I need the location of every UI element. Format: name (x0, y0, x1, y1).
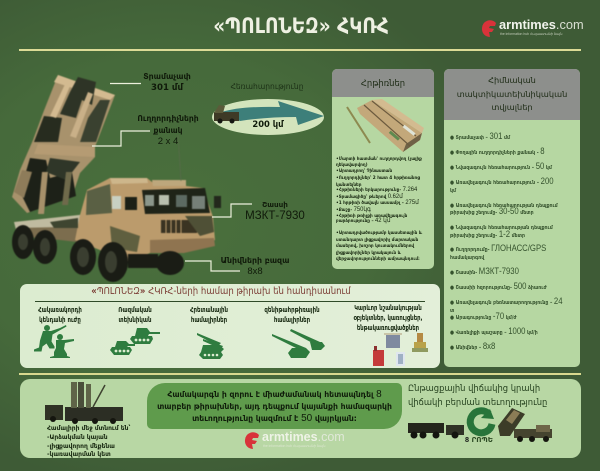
rocket specs: •Մարտի հատման՝ ուղղորդվող (չալիք (336, 157, 422, 162)
callout: simultaneous targets: տարբեր թիրախներ, այդ դեպքում կայանքի համազարկի (157, 402, 392, 411)
panel: rockets: •Քաշը- 750կգ (336, 206, 371, 213)
panel: rockets: •Տրամագիծը՝ թևերով 0.62մ (336, 193, 403, 200)
specifications list (450, 131, 563, 351)
composition text: -կառավարման կետ (47, 451, 111, 458)
composition text: -լիցքավորող մեքենա (47, 443, 115, 450)
label: launch tubes (137, 114, 199, 147)
specifications list: ● Շասսիի հզորությունը- 500 ձիաուժ (450, 281, 547, 291)
specifications list: ● Անիվներ – 8x8 (450, 341, 495, 351)
target: artillery: համալիրներ (191, 316, 227, 324)
specs heading: Հիմնական (488, 75, 536, 85)
title: «ՊՈԼՈՆԵԶ» ՀԿՌՀ (213, 14, 389, 38)
panel: rockets: •Արտադրող՝ Չինաստան (336, 169, 392, 174)
specs heading (444, 69, 580, 120)
callout lines (92, 82, 252, 272)
range arrow on ellipse (212, 99, 324, 135)
label: wheel base: Անիվների բազա (221, 256, 289, 265)
specifications list: ● Առավելագույն հեռահարություն – 200 (450, 176, 554, 186)
target: anti-aircraft complexes (264, 306, 325, 358)
target: strategic sites: ենթակառուցվածքներ (357, 324, 419, 332)
camouflage (60, 77, 96, 118)
specifications list: համակարգով (450, 255, 484, 261)
readiness text (408, 383, 547, 407)
target: military equipment: տեխնիկան (118, 316, 152, 324)
wheels (12, 225, 184, 282)
panel: rockets: ստանդարտ լիցքավորիչ մարտական (336, 238, 418, 243)
readiness text: վիճակի բերման տեւողությունը (408, 397, 547, 407)
lower divider (19, 373, 581, 374)
header divider (19, 49, 581, 50)
panel: main specifications (444, 69, 580, 367)
logo: armtimes top (482, 17, 584, 37)
specifications list: ● Ուղղորդումը- ГЛОНАСС/GPS (450, 243, 546, 253)
specs heading: տվյալներ (491, 102, 533, 112)
logo: armtimes top: armtimes.com (499, 17, 584, 32)
target: anti-aircraft complexes: համալիրներ (274, 316, 310, 324)
target: manpower (34, 306, 82, 358)
specifications list: ● Տրամաչափ – 301 մմ (450, 131, 510, 141)
panel: rockets: •Արտադրվածությամբ կասսետային և (336, 231, 422, 236)
specifications list: տ (450, 308, 454, 314)
panel: rockets: բարձրությունը – 42 կմ (336, 217, 391, 224)
label: launch tubes: Ուղղորդիչների (137, 114, 199, 123)
panel: targets (20, 284, 440, 368)
composition text: Համալիրի մեջ մտնում են՝ (47, 425, 130, 432)
logo: armtimes bottom: the information hub Հայաստանի ձայն (263, 444, 325, 448)
label: caliber: Տրամաչափ (143, 72, 191, 81)
range value: 200 կմ (252, 119, 284, 129)
target: military equipment (110, 306, 160, 355)
label: launch tubes: քանակ (154, 126, 182, 134)
target: strategic sites: օբյեկտներ, կառույցներ, (354, 314, 422, 322)
target: anti-aircraft complexes: զենիթահրթիռային (264, 306, 320, 314)
panel: rockets: •1 հրթիռի ծավալն ասսամբլ – 275մ (336, 199, 419, 206)
target: strategic sites (354, 304, 428, 366)
panel: rockets: կանտեյներ (336, 183, 361, 188)
label: caliber: 301 մմ (151, 82, 183, 92)
panel: rockets: •Հրթիռների երկարությունը- 7.264 (336, 186, 417, 193)
readiness text: Ընթացքային վիճակից կրակի (408, 383, 540, 393)
callout: simultaneous targets: Համակարգն ի զորու է միաժամանակ հետապնդել 8 (167, 389, 382, 400)
icon: complex vehicles (45, 382, 123, 424)
panel: rockets: վերջավորությունների ամրապնդում: (336, 257, 420, 262)
specifications list: ● Առավելագույն հեռահարության դեպքում (450, 203, 558, 209)
callout: simultaneous targets: տեւողությունը կազմում է 50 վայրկյան: (192, 413, 357, 424)
icon: rocket crates (346, 99, 424, 152)
icon: tanks (110, 328, 160, 355)
target: military equipment: Ռազմական (118, 306, 152, 314)
callout: simultaneous targets (147, 383, 402, 429)
specifications list: ● Առավելագույն բեռնատարողությունը – 24 (450, 296, 563, 306)
rockets heading: Հրթիռներ (361, 78, 405, 88)
target: manpower: կենդանի ուժը (39, 316, 81, 324)
targets heading: «ՊՈԼՈՆԵԶ» ՀԿՌՀ-ների համար թիրախ են հանդիսանում (91, 286, 351, 297)
specs heading: տակտիկատեխնիկական (457, 88, 567, 98)
logo: armtimes top: the information hub Հայաստանի ձայն (500, 32, 562, 36)
icon: soldiers (34, 325, 74, 358)
panel: rockets: •Ուղղորդիչներ՝ 2 հատ 4 հրթիռանոց (336, 176, 420, 181)
readiness time: 8 ՐՈՊԵ (465, 435, 493, 444)
target: artillery: Հրետանային (190, 306, 228, 314)
cab body (75, 178, 215, 266)
label: chassis (245, 200, 305, 222)
specifications list: թիրախից շեղումը- 30-50 մետր (450, 206, 534, 216)
label: chassis: МЗКТ-7930 (245, 210, 305, 222)
composition text: -Արձակման կայան (47, 434, 108, 441)
icon: missile launchers (272, 329, 325, 358)
panel: rockets: ղեկավարվող) (336, 163, 368, 168)
truck illustration: POLONEZ launcher (12, 74, 222, 282)
specifications list: կմ (450, 188, 456, 194)
icon: transport truck (408, 423, 464, 438)
composition text (47, 424, 130, 458)
antenna (178, 135, 181, 181)
panel: rockets: լիցքավորիչներ կրակայուն և (336, 251, 401, 256)
panel: rockets: •Հրթիռի թռիչքի առավելագույն (336, 214, 407, 219)
label: launch tubes: 2 x 4 (158, 136, 178, 147)
specifications list: ● Նվազագույն հեռահարություն – 50 կմ (450, 161, 552, 171)
range graphic (212, 82, 324, 135)
complex composition (45, 382, 130, 458)
mirror (214, 196, 221, 208)
panel: bottom facts (20, 379, 581, 458)
label: wheel base: 8x8 (247, 266, 263, 276)
targets rule (35, 301, 425, 302)
specifications list: ● Նվազագույն հեռահարության դեպքում (450, 225, 553, 231)
specifications list: ● Փողային ուղղորդիչների քանակ - 8 (450, 146, 545, 156)
specifications list: թիրախից շեղումը- 1-2 մետր (450, 229, 525, 239)
logo: armtimes bottom: armtimes.com (262, 430, 345, 444)
rockets heading (332, 69, 434, 97)
icon: artillery launcher (197, 333, 224, 359)
target: manpower: Հակառակորդի (38, 306, 82, 314)
specifications list: ● Վառելիքի պաշարը – 1000 կմ/ի (450, 326, 538, 336)
chassis rail (14, 214, 108, 230)
icon: buildings (373, 333, 428, 366)
target: artillery (190, 306, 228, 359)
label: chassis: Շասսի (262, 200, 288, 209)
icon: launcher raised (498, 408, 552, 442)
readiness icons (408, 407, 552, 444)
range heading: Հեռահարությունը (230, 82, 304, 91)
label: caliber (143, 72, 191, 92)
label: wheel base (221, 256, 289, 276)
specifications list: ● Շասսին- МЗКТ-7930 (450, 266, 519, 276)
grille and camouflage (161, 220, 197, 233)
launcher silhouette (12, 75, 115, 213)
panel: rockets: մասերով, խոշոր կուտակումներով (336, 244, 414, 249)
logo: armtimes bottom (244, 430, 345, 449)
launcher cross beam (34, 144, 95, 157)
cab windows (142, 188, 210, 214)
target: strategic sites: Կարևոր նշանակության (354, 304, 422, 312)
panel: rockets (332, 69, 434, 269)
specifications list: ● Արագությունը -70 կմ/ժ (450, 311, 517, 321)
icon: cycle arrow (466, 407, 496, 436)
